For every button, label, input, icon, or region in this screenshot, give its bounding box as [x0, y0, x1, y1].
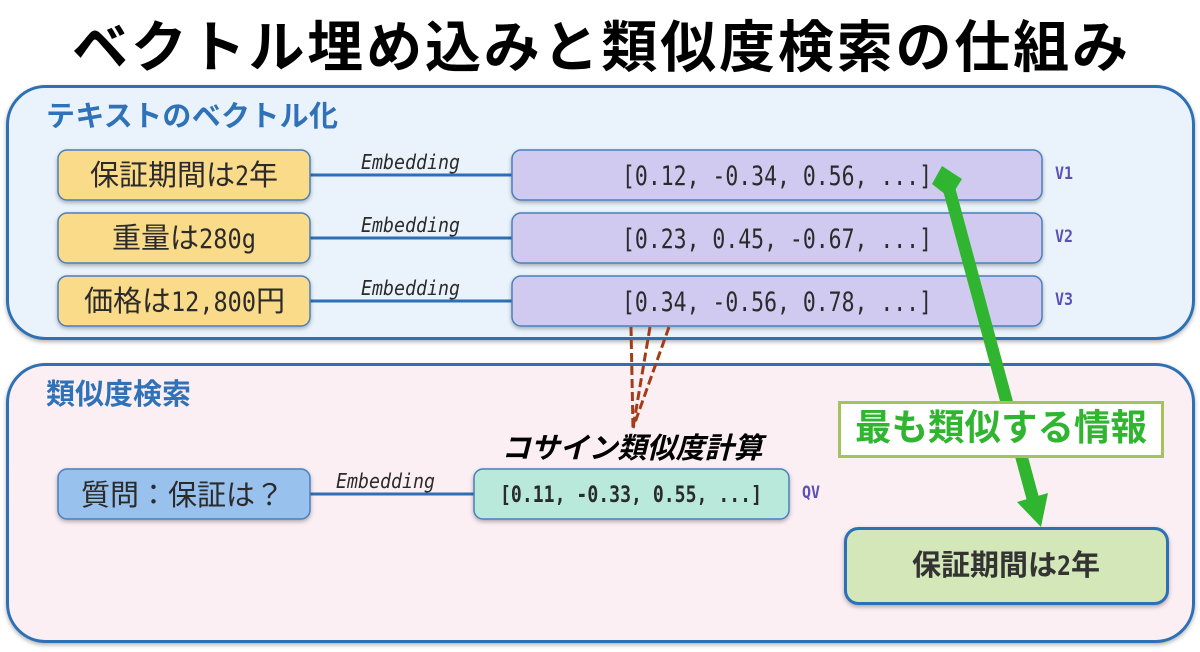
text box: warranty: 2 [235, 161, 249, 192]
cosine similarity label: コサイン類似度計算 [501, 433, 767, 465]
result box: 年 [1071, 549, 1100, 582]
text box: warranty: 保証期間は [90, 159, 235, 192]
result box: 2 [1057, 551, 1071, 582]
result box: 保証期間は [912, 549, 1057, 582]
callout: most similar information [840, 402, 1162, 456]
label QV: QV [802, 483, 820, 503]
text box: weight: 重量は [112, 222, 199, 255]
text box: price: 円 [256, 286, 285, 318]
text box: price: 12,800 [171, 287, 256, 318]
label V1: V1 [1055, 164, 1073, 184]
title: ベクトル埋め込みと類似度検索の仕組み [72, 16, 1128, 79]
embedding label 3: Embedding [361, 276, 460, 300]
connector row 1 [310, 174, 512, 176]
vector box v1 [512, 150, 1042, 200]
vector box v1: [0.12, -0.34, 0.56, ...] [622, 161, 932, 192]
vector box v2: [0.23, 0.45, -0.67, ...] [622, 224, 932, 255]
text box: price: 価格は [84, 285, 171, 318]
label V3: V3 [1055, 290, 1073, 310]
result box [846, 528, 1168, 604]
vector box v3 [512, 276, 1042, 326]
query box: 質問：保証は？ [81, 479, 284, 512]
query vector box [474, 469, 789, 519]
connector row 2 [310, 236, 512, 240]
connector row 3 [310, 300, 512, 302]
query box [58, 469, 310, 519]
text box: warranty: 年 [249, 159, 278, 192]
text box: weight: 280g [199, 224, 256, 255]
embedding label 2: Embedding [361, 213, 460, 237]
heading: text vectorization: テキストのベクトル化 [46, 100, 338, 133]
query vector box: [0.11, -0.33, 0.55, ...] [500, 483, 762, 508]
text box: price [58, 276, 310, 326]
panel: text vectorization [8, 86, 1194, 338]
text box: warranty [58, 150, 310, 200]
vector box v3: [0.34, -0.56, 0.78, ...] [622, 287, 932, 318]
vector box v2 [512, 213, 1042, 263]
embedding label 1: Embedding [361, 150, 460, 174]
label V2: V2 [1055, 227, 1073, 247]
panel: similarity search [8, 364, 1194, 642]
connector query [310, 492, 474, 496]
dashed lines: v3 to cosine similarity [631, 327, 669, 428]
heading: similarity search: 類似度検索 [46, 378, 191, 411]
arrow: green double-headed [932, 166, 1048, 527]
text box: weight [58, 213, 310, 263]
embedding label query: Embedding [336, 469, 435, 493]
callout: most similar information: 最も類似する情報 [855, 407, 1147, 448]
